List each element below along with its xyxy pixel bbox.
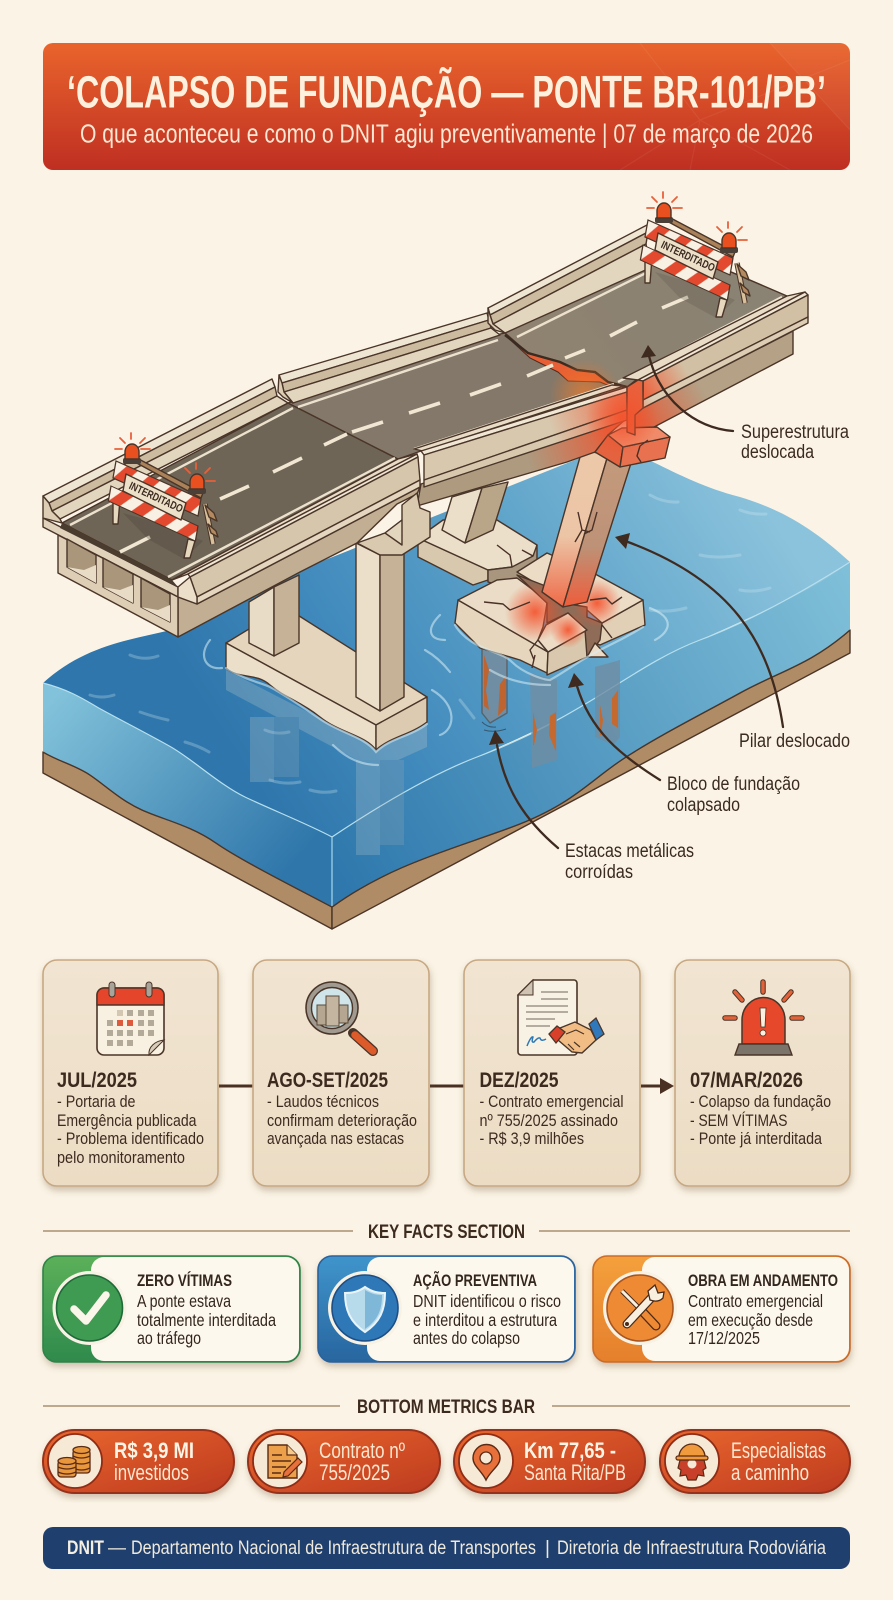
icon: wrench and screwdriver: [603, 1271, 677, 1345]
displaced tilted pillar: [542, 450, 632, 607]
icon: alarm beacon: [725, 982, 802, 1055]
barricade: left: INTERDITADO: [127, 480, 185, 516]
date heading: DEZ/2025: [480, 1069, 559, 1092]
fact text: [137, 1291, 276, 1348]
metric text: [114, 1438, 194, 1485]
description: [267, 1092, 417, 1148]
description: confirmam deterioração: [267, 1111, 417, 1130]
metric pill: specialists: [660, 1430, 850, 1493]
icon: helmet and gear: [665, 1434, 719, 1488]
section heading: key facts: KEY FACTS SECTION: [368, 1222, 525, 1243]
description: [480, 1092, 624, 1148]
fact title: OBRA EM ANDAMENTO: [688, 1271, 838, 1290]
metric text: investidos: [114, 1460, 189, 1485]
description: - Colapso da fundação: [690, 1092, 831, 1111]
description: - Contrato emergencial: [480, 1092, 624, 1111]
metric pill: contract: [248, 1430, 440, 1493]
callout: bloco de fundação colapsado: Bloco de fundação: [667, 774, 800, 795]
date heading: JUL/2025: [57, 1069, 137, 1092]
key fact card: obra em andamento: [593, 1256, 850, 1362]
description: avançada nas estacas: [267, 1129, 404, 1148]
callout: superestrutura deslocada: Superestrutura: [741, 422, 849, 443]
footer text: —: [108, 1538, 126, 1559]
back barriers: [43, 225, 650, 523]
footer text: Diretoria de Infraestrutura Rodoviária: [557, 1538, 826, 1559]
callout: bloco de fundação colapsado: colapsado: [667, 795, 740, 816]
fact title: ZERO VÍTIMAS: [137, 1271, 232, 1290]
icon: contract and handshake: [518, 980, 604, 1055]
icon: map pin: [459, 1434, 513, 1488]
fact text: [688, 1291, 823, 1348]
icon: shield: [328, 1271, 402, 1345]
callout: estacas metálicas corroídas: [489, 730, 694, 883]
fact text: e interditou a estrutura: [413, 1310, 557, 1330]
key fact card: zero vítimas: [43, 1256, 300, 1362]
description: - Problema identificado: [57, 1129, 204, 1148]
metric text: a caminho: [731, 1460, 809, 1485]
fact text: 17/12/2025: [688, 1328, 760, 1348]
barricade: right: [640, 192, 750, 318]
footer text: DNIT: [67, 1538, 104, 1559]
metric text: Santa Rita/PB: [524, 1460, 626, 1485]
callout: bloco de fundação colapsado: [568, 673, 800, 816]
metric text: 755/2025: [319, 1460, 390, 1485]
date heading: AGO-SET/2025: [267, 1069, 388, 1092]
description: - Ponte já interditada: [690, 1129, 822, 1148]
fact text: ao tráfego: [137, 1328, 201, 1348]
icon: calendar: [97, 982, 164, 1055]
front barriers: [172, 292, 808, 604]
icon: coins: [48, 1434, 102, 1488]
footer text: |: [545, 1538, 550, 1559]
callout: estacas metálicas corroídas: Estacas metálicas: [565, 841, 694, 862]
fact text: em execução desde: [688, 1310, 813, 1330]
far pier and cracked footing: [418, 482, 537, 590]
timeline connectors: [219, 1078, 674, 1094]
metric text: Km 77,65 -: [524, 1438, 616, 1463]
callout: estacas metálicas corroídas: corroídas: [565, 862, 633, 883]
footer bar: [43, 1527, 850, 1569]
key fact card: ação preventiva: [318, 1256, 575, 1362]
timeline card: AGO-SET/2025: [253, 960, 429, 1186]
metric pill: location: [454, 1430, 645, 1493]
callout: pilar deslocado: [615, 533, 850, 752]
description: [57, 1092, 204, 1167]
collapsed foundation block: [425, 553, 668, 685]
callout: superestrutura deslocada: deslocada: [741, 442, 814, 463]
barricade: left: [108, 433, 218, 559]
description: pelo monitoramento: [57, 1148, 185, 1167]
description: [690, 1092, 831, 1148]
metric text: [731, 1438, 826, 1485]
description: nº 755/2025 assinado: [480, 1111, 618, 1130]
date heading: 07/MAR/2026: [690, 1069, 803, 1092]
description: - Portaria de: [57, 1092, 136, 1111]
fact text: Contrato emergencial: [688, 1291, 823, 1311]
icon: check mark: [52, 1271, 126, 1345]
near pier with footing: [204, 543, 451, 765]
corroded metal piles: [482, 645, 620, 768]
description: - R$ 3,9 milhões: [480, 1129, 584, 1148]
icon: magnifier: [306, 982, 373, 1051]
bridge deck beams and slab: [43, 331, 793, 637]
metric text: Contrato nº: [319, 1438, 405, 1463]
footer text: [67, 1538, 826, 1559]
description: - Laudos técnicos: [267, 1092, 379, 1111]
section heading: bottom metrics: BOTTOM METRICS BAR: [357, 1397, 535, 1418]
title banner: [43, 43, 850, 170]
callout: pilar deslocado: Pilar deslocado: [739, 731, 850, 752]
metric pill: investment: [43, 1430, 234, 1493]
metric text: Especialistas: [731, 1438, 826, 1463]
barricade: right: INTERDITADO: [659, 239, 717, 275]
description: - SEM VÍTIMAS: [690, 1111, 788, 1130]
timeline card: 07/MAR/2026: [675, 960, 850, 1186]
submerged structure of near pier: [226, 670, 427, 855]
fact title: AÇÃO PREVENTIVA: [413, 1270, 537, 1290]
bridge illustration: [43, 192, 850, 929]
callout: superestrutura deslocada: [641, 345, 849, 463]
fact text: totalmente interditada: [137, 1310, 276, 1330]
timeline card: JUL/2025: [43, 960, 218, 1186]
fact text: DNIT identificou o risco: [413, 1291, 561, 1311]
fact text: A ponte estava: [137, 1291, 231, 1311]
road surface with lane markings: [60, 250, 787, 587]
terrain block: soil and water: [43, 450, 850, 929]
footer text: Departamento Nacional de Infraestrutura de Transportes: [131, 1538, 536, 1559]
fact text: [413, 1291, 561, 1348]
pier cap: [357, 493, 430, 555]
metric text: [319, 1438, 405, 1485]
metric text: R$ 3,9 MI: [114, 1438, 194, 1463]
description: Emergência publicada: [57, 1111, 197, 1130]
fact text: antes do colapso: [413, 1328, 520, 1348]
timeline card: DEZ/2025: [464, 960, 640, 1186]
icon: document with pencil: [253, 1434, 307, 1488]
metric text: [524, 1438, 626, 1485]
